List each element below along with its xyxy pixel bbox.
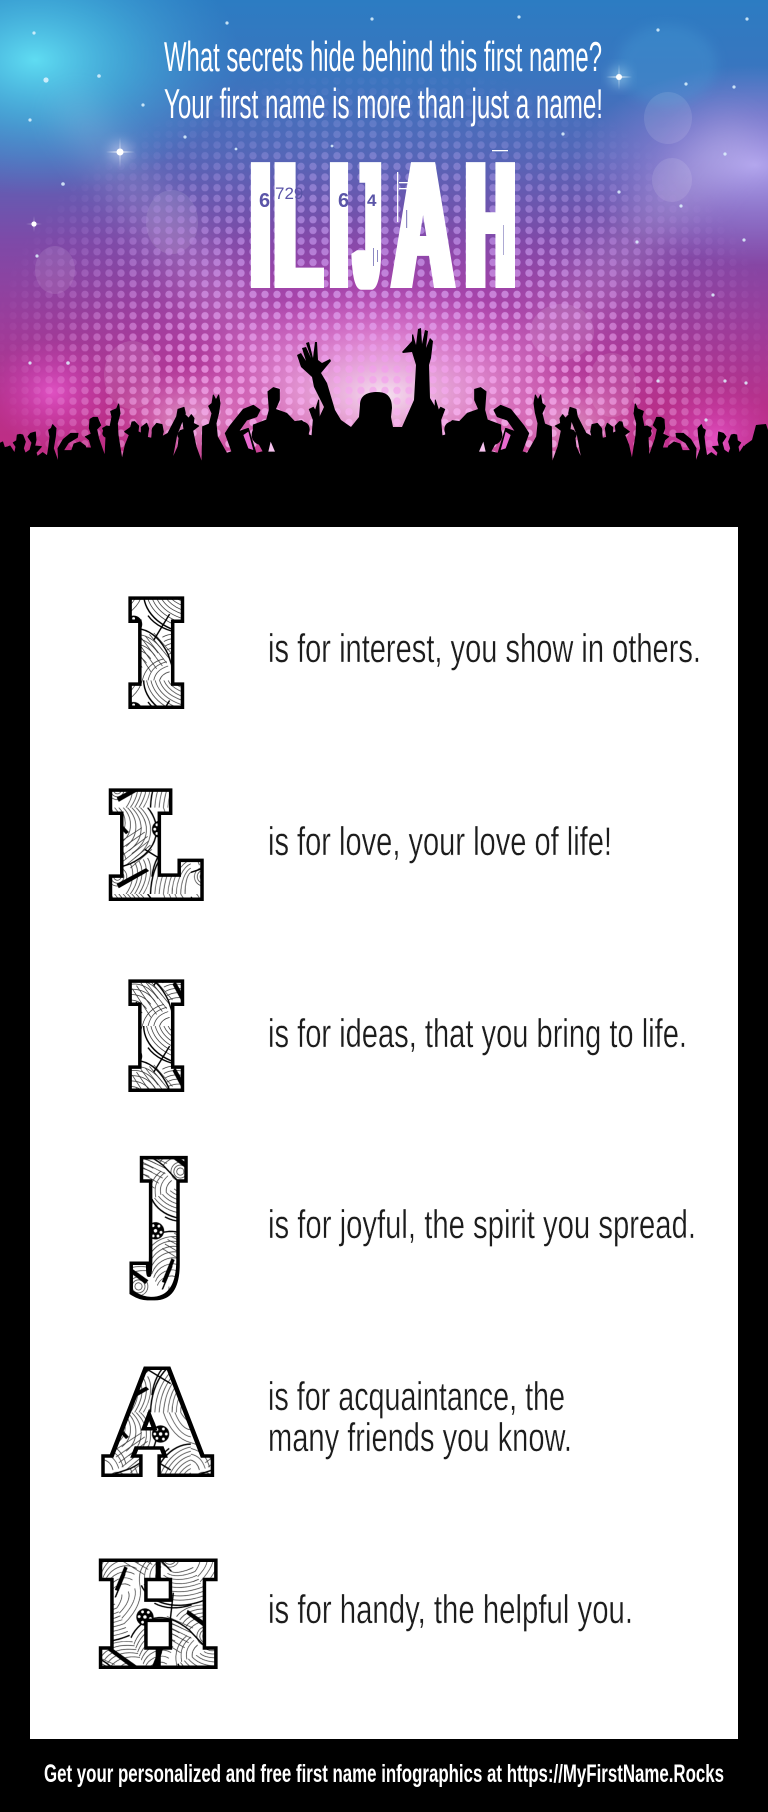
name title <box>252 122 515 328</box>
grunge marks on title: 6 <box>338 190 349 212</box>
name title: H <box>466 123 515 328</box>
stage light beams <box>50 90 760 430</box>
star flare left <box>106 137 135 168</box>
white scratches beside title <box>397 150 508 222</box>
row: letter L <box>112 772 612 922</box>
star flare right <box>606 64 632 90</box>
text: acquaintance <box>268 1375 572 1460</box>
row: letter J <box>137 1137 696 1295</box>
header stage background <box>0 0 768 505</box>
name title: A <box>393 123 453 328</box>
grunge marks on title: 6 <box>259 190 270 212</box>
letter I illustration: I <box>132 580 181 730</box>
letter J illustration: J <box>137 1137 184 1295</box>
letter L illustration: L <box>112 772 197 922</box>
row: letter A <box>108 1346 572 1500</box>
row: letter I second <box>132 964 687 1114</box>
left pink spot <box>0 337 117 447</box>
text: handy: is for handy, the helpful you. <box>268 1588 633 1632</box>
row: letter H <box>100 1538 633 1692</box>
right pink spot <box>651 385 768 495</box>
name title: L <box>274 122 321 327</box>
lavender glow <box>575 65 768 265</box>
row: letter I <box>132 580 701 730</box>
centre white glow <box>184 285 584 505</box>
text: acquaintance: is for acquaintance, the <box>268 1375 565 1419</box>
name title: I <box>252 124 269 328</box>
stars <box>28 15 749 422</box>
text: acquaintance: many friends you know. <box>268 1416 572 1460</box>
bokeh blobs <box>35 92 692 417</box>
letter I illustration: I <box>132 964 181 1114</box>
star flare small <box>26 216 42 232</box>
centre figure with raised hands <box>297 328 436 480</box>
grunge marks on title: 729 <box>275 184 303 203</box>
grunge marks on title: 4 <box>367 191 377 210</box>
crowd right side <box>434 388 754 510</box>
crowd left side <box>0 388 320 510</box>
grunge marks on title <box>259 184 504 266</box>
cyan glow <box>0 0 240 195</box>
crowd silhouette <box>0 328 768 536</box>
letter H illustration: H <box>100 1538 216 1692</box>
crowd base <box>0 476 768 536</box>
smoke glow right <box>490 370 650 480</box>
name title: I <box>331 122 347 327</box>
text: love: is for love, your love of life! <box>268 820 612 864</box>
dot matrix wall <box>14 83 755 458</box>
name title: J <box>356 124 379 328</box>
blue glow <box>617 25 717 105</box>
right edge fans <box>745 424 768 480</box>
centre pink glow <box>74 210 694 470</box>
letter A illustration: A <box>108 1346 208 1500</box>
white content panel <box>30 527 738 1739</box>
smoke glow left <box>110 365 270 475</box>
